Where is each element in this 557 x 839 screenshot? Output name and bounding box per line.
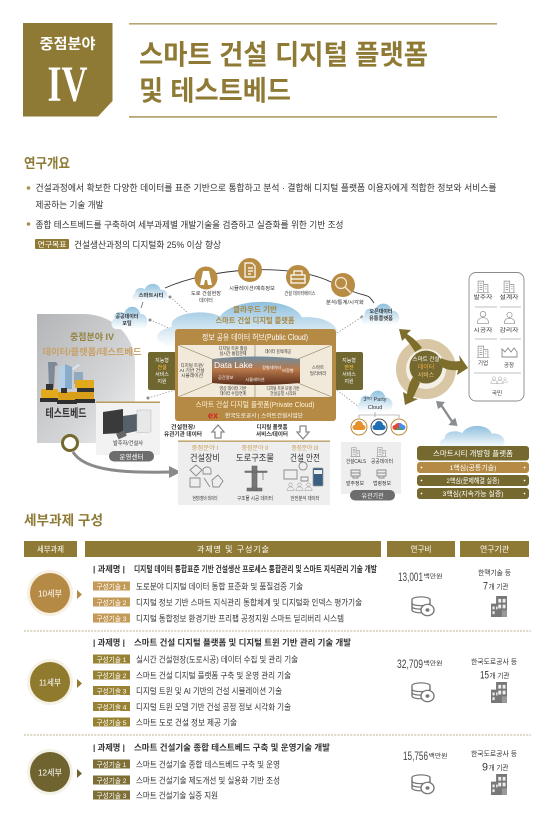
data line bbox=[165, 270, 374, 303]
institutions: 9 bbox=[482, 762, 488, 774]
panel: smart city open platform bbox=[417, 446, 529, 499]
panel: left service: 서비스 bbox=[155, 371, 169, 378]
technologies: 스마트 건설기술 제도개선 및 실용화 기반 조성 bbox=[136, 776, 280, 786]
icon: simulation and prediction bbox=[229, 258, 275, 292]
focus area 2: 구조물 시공 데이터 bbox=[237, 495, 273, 502]
inner panel: functions: 영상 데이터 기반 bbox=[220, 385, 246, 392]
panel: right service bbox=[335, 352, 363, 390]
panel: users: 시공자 bbox=[474, 326, 492, 334]
focus area 1: 건설장비 bbox=[190, 453, 220, 463]
inner panel: functions: 디지털 트윈 활용 bbox=[218, 345, 248, 352]
table header: 세부과제 bbox=[37, 545, 64, 554]
institutions bbox=[471, 749, 518, 795]
panel: operation center: 발주자/건설사 bbox=[113, 439, 143, 447]
row: 12세부 bbox=[27, 742, 518, 800]
panel: right service: 안전 bbox=[344, 364, 354, 371]
panel: left service: 건설 bbox=[157, 364, 167, 371]
arrow: double-headed ring to city platform bbox=[436, 401, 458, 426]
panel: right service: 서비스 bbox=[342, 371, 356, 378]
panel: digital platform core bbox=[175, 329, 336, 421]
budget bbox=[403, 749, 448, 794]
panel: right service: 지능형 bbox=[342, 357, 356, 364]
label: platform service data: 디지털 플랫폼 bbox=[256, 423, 288, 431]
cloud: smart city bbox=[132, 284, 168, 301]
focus area 3: 건설 안전 bbox=[290, 453, 320, 463]
title bbox=[129, 23, 497, 118]
technologies bbox=[93, 582, 362, 624]
label: platform service data bbox=[256, 423, 288, 438]
logo line: Korea Expressway Corporation: 한국도로공사 | 스마트건설사업단 bbox=[225, 412, 304, 420]
research overview text: 건설과정에서 확보한 다양한 데이터를 표준 기반으로 통합하고 분석 · 결합해 디지털 플랫폼 이용자에게 적합한 정보와 서비스를 bbox=[36, 182, 497, 193]
technologies: 구성기술 3 bbox=[96, 614, 127, 623]
inner panel: functions: 시뮬레이션 bbox=[181, 372, 203, 379]
inner panel: functions: 데이터 수집/연계 bbox=[220, 390, 246, 397]
focus area 2 bbox=[236, 444, 274, 502]
institutions: 개 기관 bbox=[490, 671, 510, 680]
heading badge: 중점분야 IV: 중점분야 bbox=[40, 36, 96, 53]
table header: 과제명 및 구성기술 bbox=[197, 544, 269, 554]
icon: road site data bbox=[191, 266, 221, 304]
cloud: open data platform: 유통플랫폼 bbox=[369, 315, 393, 322]
panel: related agencies: 법령정보 bbox=[373, 480, 391, 487]
photo: data lake: 시뮬레이션 bbox=[245, 376, 265, 383]
arrow: top left bbox=[399, 329, 422, 352]
project title bbox=[93, 564, 377, 574]
inner panel: functions: 스마트 bbox=[312, 364, 324, 371]
panel: users bbox=[469, 272, 524, 401]
bar: core 1: 1핵심(공통기술) bbox=[450, 463, 496, 472]
panel: users: 공장 bbox=[504, 362, 514, 369]
technologies bbox=[93, 654, 298, 728]
focus area 3: 중점분야 III bbox=[292, 444, 319, 452]
research goal: 연구목표 bbox=[38, 240, 67, 249]
institutions: 개 기관 bbox=[488, 582, 508, 591]
cloud: smart city: 스마트시티 bbox=[138, 292, 164, 299]
panel: left service: 지능형 bbox=[155, 357, 169, 364]
arrow: testbed to focus area bbox=[62, 436, 181, 478]
technologies: 구성기술 3 bbox=[96, 686, 127, 696]
budget: 백만원 bbox=[428, 752, 448, 760]
inner panel: functions: 딜리버리 bbox=[310, 370, 326, 377]
budget bbox=[397, 657, 442, 702]
photo: data lake: 공간정보 bbox=[218, 374, 234, 380]
badge: 10세부: 10세부 bbox=[38, 588, 62, 598]
cloud: 3rd party cloud: Party bbox=[372, 397, 387, 403]
row: 11세부 bbox=[27, 638, 518, 728]
row: 10세부 bbox=[27, 564, 512, 624]
technologies: 디지털 트윈 및 AI 기반의 건설 시뮬레이션 기술 bbox=[136, 686, 282, 696]
heading badge: 중점분야 IV: IV bbox=[48, 57, 88, 113]
budget bbox=[398, 570, 442, 616]
arrow: bottom left bbox=[403, 377, 420, 405]
technologies: 도로분야 디지털 데이터 통합 표준화 및 품질검증 기술 bbox=[136, 582, 303, 592]
inner panel: functions: AI 기반 건설 bbox=[180, 367, 204, 374]
icon: testbed city and machinery bbox=[40, 362, 95, 404]
label: site data bbox=[164, 423, 202, 438]
panel: related agencies: 공공데이터 bbox=[371, 458, 393, 465]
research overview text: 제공하는 기술 개발 bbox=[36, 200, 104, 210]
panel: related agencies: 발주정보 bbox=[346, 480, 364, 487]
project title: | 과제명 | bbox=[93, 564, 125, 574]
focus area 1: 중점분야 I bbox=[192, 444, 219, 452]
diagram: smart construction data service ring: 스마트 건설 bbox=[412, 355, 440, 363]
arrow: right bbox=[439, 355, 468, 375]
panel: related agencies: 유관기관 bbox=[361, 492, 384, 500]
icons: cloud providers bbox=[351, 412, 407, 435]
panel: left service bbox=[148, 352, 176, 390]
inner panel: functions bbox=[178, 345, 332, 397]
research overview text bbox=[27, 182, 497, 230]
focus area 1: 현장/장비 데이터 bbox=[192, 495, 218, 502]
technologies: 디지털 통합정보 환경기반 프리팹 공정지원 스마트 딜리버리 시스템 bbox=[136, 614, 344, 624]
photo: data lake: 정형데이터 bbox=[262, 364, 281, 371]
panel: testbed bbox=[37, 314, 142, 443]
cloud: open data platform bbox=[361, 304, 399, 325]
panel: users: 설계자 bbox=[500, 293, 518, 301]
inner panel: functions: 실시간 통합관제 bbox=[220, 350, 246, 357]
panel: testbed: 데이터/플랫폼/테스트베드 bbox=[42, 346, 142, 357]
budget: 32,709 bbox=[397, 657, 423, 671]
icon: analysis, statistics, visualization: 분석/통계/시각화 bbox=[326, 299, 364, 306]
panel: left service: 지원 bbox=[157, 378, 167, 385]
panel: operation center: 운영센터 bbox=[120, 452, 143, 461]
cloud: open data platform: 오픈데이터 bbox=[370, 308, 393, 315]
cloud: 3rd party cloud bbox=[357, 391, 393, 412]
dotted connectors bbox=[141, 296, 364, 408]
research overview text: 종합 테스트베드를 구축하여 세부과제별 개발기술을 검증하고 실증화를 위한 기반 조성 bbox=[36, 219, 344, 230]
research goal bbox=[35, 239, 221, 250]
project title: 스마트 건설 디지털 플랫폼 및 디지털 트윈 기반 관리 기술 개발 bbox=[134, 638, 351, 648]
label: site data: 유관기관 데이터 bbox=[164, 430, 202, 438]
project title: 디지털 데이터 통합표준 기반 건설생산 프로세스 통합관리 및 스마트 지식관리 기술 개발 bbox=[134, 564, 377, 574]
icon: road site data: 도로 건설현장 bbox=[191, 290, 221, 297]
icon: road site data: 데이터 bbox=[199, 297, 213, 304]
inner panel: functions: 디지털 트윈 모델 기반 bbox=[266, 385, 300, 392]
technologies: 스마트 건설기술 종합 테스트베드 구축 및 운영 bbox=[136, 760, 280, 770]
bar: core 3: 3핵심(지속가능 실증) bbox=[442, 489, 504, 498]
table header: 연구기관 bbox=[480, 544, 510, 554]
technologies: 구성기술 2 bbox=[96, 776, 127, 785]
technologies bbox=[93, 760, 280, 800]
panel: users: 감리자 bbox=[500, 326, 518, 334]
title: 스마트 건설 디지털 플랫폼 bbox=[139, 39, 428, 70]
arrow: down bbox=[297, 426, 309, 439]
heading: public cloud: 정보 공유 데이터 허브(Public Cloud) bbox=[202, 332, 308, 342]
table header bbox=[24, 541, 529, 557]
budget: 백만원 bbox=[424, 660, 442, 668]
technologies: 스마트 도로 건설 정보 제공 기술 bbox=[136, 718, 237, 728]
bar: core 2: 2핵심(문제해결 실증) bbox=[446, 476, 500, 485]
technologies: 구성기술 3 bbox=[96, 791, 127, 800]
project title: | 과제명 | bbox=[93, 742, 125, 752]
diagram: smart construction data service ring: 데이터 bbox=[418, 363, 434, 371]
focus area 1 bbox=[190, 444, 223, 502]
icon: construction database: 건설 데이터베이스 bbox=[284, 290, 316, 297]
institutions bbox=[471, 657, 518, 703]
focus area 3: 안전분석 데이터 bbox=[290, 495, 320, 502]
panel: users: 국민 bbox=[492, 389, 502, 397]
technologies: 스마트 건설기술 실증 지원 bbox=[136, 790, 218, 800]
cloud: public data portal: 공공데이터 bbox=[116, 313, 139, 320]
panel: focus areas bbox=[178, 440, 330, 505]
photo: data lake: Data Lake bbox=[214, 360, 253, 370]
logo line: Korea Expressway Corporation: ex bbox=[208, 410, 218, 420]
cloud: 3rd party cloud: RD bbox=[367, 396, 372, 400]
focus area 2: 중점분야 II bbox=[242, 444, 269, 452]
institutions: 15 bbox=[480, 670, 489, 682]
panel: related agencies: 건설CALS bbox=[346, 458, 367, 465]
institutions: 한국도로공사 등 bbox=[471, 657, 518, 666]
institutions: 7 bbox=[483, 580, 488, 592]
badge: 10세부 bbox=[27, 570, 82, 616]
budget: 15,756 bbox=[403, 749, 428, 763]
badge: 11세부: 11세부 bbox=[39, 678, 61, 688]
icon: construction database bbox=[284, 265, 316, 297]
heading: private cloud: 스마트 건설 디지털 플랫폼(Private Cloud) bbox=[196, 400, 314, 409]
technologies: 디지털 트윈 모델 기반 건설 공정 정보 시각화 기술 bbox=[136, 702, 291, 712]
project title: 스마트 건설기술 종합 테스트베드 구축 및 운영기술 개발 bbox=[134, 742, 330, 752]
diagram: smart construction data service ring: 서비스 bbox=[418, 371, 435, 379]
cloud: cloud based platform heading: 클라우드 기반 bbox=[233, 304, 277, 314]
technologies: 구성기술 4 bbox=[96, 702, 127, 712]
technologies: 디지털 정보 기반 스마트 지식관리 통합체계 및 디지털화 인덱스 평가기술 bbox=[136, 598, 362, 608]
icon: simulation and prediction: 시뮬레이션/예측정보 bbox=[229, 285, 275, 292]
cloud: cloud based platform heading: 스마트 건설 디지털 플랫폼 bbox=[216, 315, 295, 325]
cloud: public data portal bbox=[111, 307, 147, 329]
cloud: cloud based platform heading bbox=[157, 302, 337, 348]
technologies: 구성기술 2 bbox=[96, 671, 127, 680]
research goal: 건설생산과정의 디지털화 25% 이상 향상 bbox=[74, 239, 221, 250]
institutions bbox=[478, 568, 512, 617]
technologies: 구성기술 1 bbox=[96, 655, 127, 664]
badge: 12세부 bbox=[27, 749, 82, 795]
label: site data: 건설현장/ bbox=[171, 423, 195, 431]
institutions: 한국도로공사 등 bbox=[471, 749, 518, 758]
badge: 11세부 bbox=[27, 659, 82, 705]
panel: right service: 지원 bbox=[344, 378, 354, 385]
icon: monitors bbox=[103, 409, 151, 439]
institutions: 개 기관 bbox=[488, 763, 508, 772]
technologies: 스마트 건설 디지털 플랫폼 구축 및 운영 관리 기술 bbox=[136, 670, 291, 680]
label: platform service data: 서비스/데이터 bbox=[256, 430, 288, 438]
focus area 2: 도로구조물 bbox=[236, 453, 274, 463]
cloud: above city platform bbox=[440, 426, 504, 449]
photo: data lake: 비정형 bbox=[282, 367, 294, 374]
diagram: smart construction data service ring bbox=[399, 329, 468, 405]
heading badge: 중점분야 IV bbox=[23, 23, 112, 116]
cloud: public data portal: 포털 bbox=[122, 320, 132, 327]
inner panel: functions: 디지털 트윈/ bbox=[180, 362, 204, 369]
panel: operation center bbox=[96, 402, 160, 462]
inner panel: functions: 건설공정 시각화 bbox=[270, 390, 296, 397]
panel: users: 기업 bbox=[478, 359, 488, 367]
cloud: 3rd party cloud: Cloud bbox=[368, 405, 382, 411]
section heading: 연구개요: 연구개요 bbox=[24, 156, 70, 171]
institutions: 한맥기술 등 bbox=[478, 568, 512, 577]
panel: related agencies bbox=[341, 442, 401, 500]
panel: users: 발주자 bbox=[474, 293, 492, 301]
technologies: 구성기술 1 bbox=[96, 582, 127, 591]
icon: analysis, statistics, visualization bbox=[326, 273, 364, 306]
focus area 3 bbox=[284, 444, 323, 502]
panel: testbed: 테스트베드 bbox=[46, 406, 87, 420]
panel: smart city open platform: 스마트시티 개방형 플랫폼 bbox=[433, 448, 513, 458]
technologies: 구성기술 5 bbox=[96, 718, 127, 727]
badge: 12세부: 12세부 bbox=[38, 768, 62, 778]
cloud: 3rd party cloud: 3 bbox=[363, 397, 367, 403]
budget: 13,001 bbox=[398, 570, 423, 584]
table header: 연구비 bbox=[410, 545, 432, 554]
section heading: 세부과제 구성: 세부과제 구성 bbox=[24, 513, 103, 528]
budget: 백만원 bbox=[424, 572, 442, 580]
technologies: 구성기술 1 bbox=[96, 760, 127, 769]
technologies: 실시간 건설현장(도로시공) 데이터 수집 및 관리 기술 bbox=[136, 654, 298, 664]
project title: | 과제명 | bbox=[93, 638, 125, 648]
panel: testbed: 중점분야 IV bbox=[70, 331, 114, 342]
title: 및 테스트베드 bbox=[139, 75, 291, 106]
photo: data lake bbox=[212, 356, 300, 385]
inner panel: functions: 데이터 검색/제공 bbox=[265, 348, 291, 355]
logo line: Korea Expressway Corporation bbox=[208, 410, 304, 420]
arrow: up bbox=[212, 425, 224, 438]
technologies: 구성기술 2 bbox=[96, 598, 127, 607]
